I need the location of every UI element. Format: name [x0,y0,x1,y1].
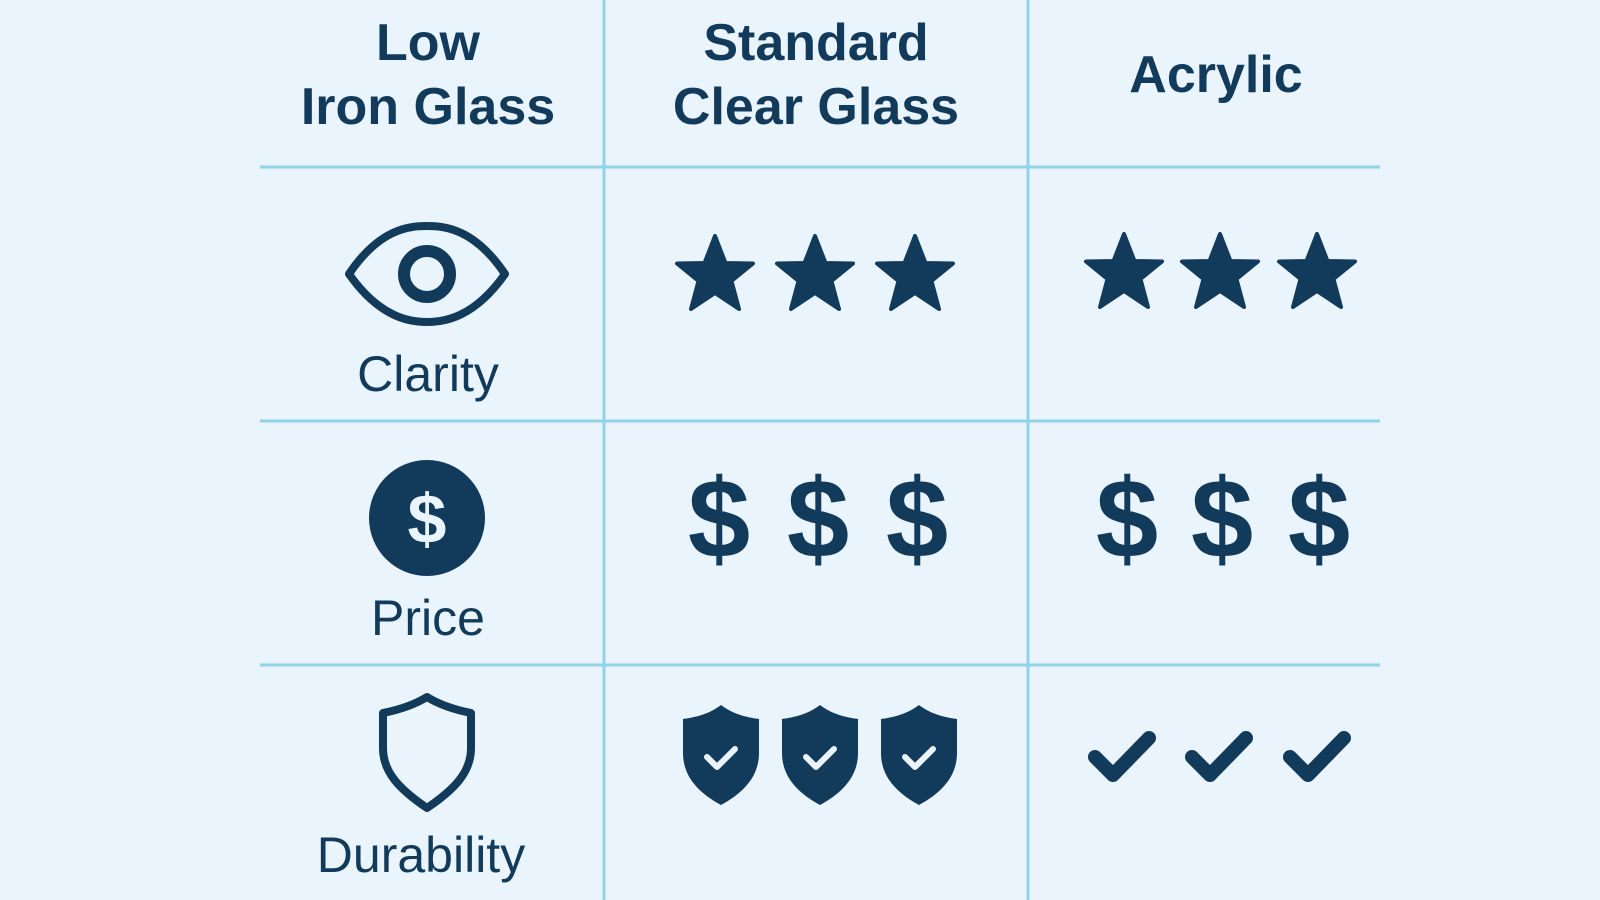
heading: Standard Clear Glass [673,14,959,136]
heading: Standard Clear Glass: Clear Glass [673,78,959,136]
dollars: standard glass: $ [886,456,948,581]
heading: Low Iron Glass: Iron Glass [301,78,555,136]
icon: dollar coin [369,460,485,576]
heading: Standard Clear Glass: Standard [703,14,929,72]
dollars: acrylic: $ [1191,456,1253,581]
heading: Low Iron Glass: Low [376,14,481,72]
label: Price: Price [371,590,485,646]
stars: acrylic [1086,234,1355,307]
icon: shield outline [383,697,471,808]
dollars: acrylic: $ [1288,456,1350,581]
dollars: acrylic [1096,456,1350,581]
shields: standard glass [683,705,957,805]
dollars: acrylic: $ [1096,456,1158,581]
dollars: standard glass: $ [787,456,849,581]
label: Durability: Durability [317,827,525,883]
icon: dollar coin: $ [408,480,446,558]
heading: Low Iron Glass [301,14,555,136]
dollars: standard glass: $ [688,456,750,581]
heading: Acrylic: Acrylic [1129,46,1303,104]
stars: standard glass [677,236,953,309]
icon: eye [349,226,505,322]
checks: acrylic [1095,738,1344,775]
label: Clarity: Clarity [357,346,499,402]
dollars: standard glass [688,456,948,581]
